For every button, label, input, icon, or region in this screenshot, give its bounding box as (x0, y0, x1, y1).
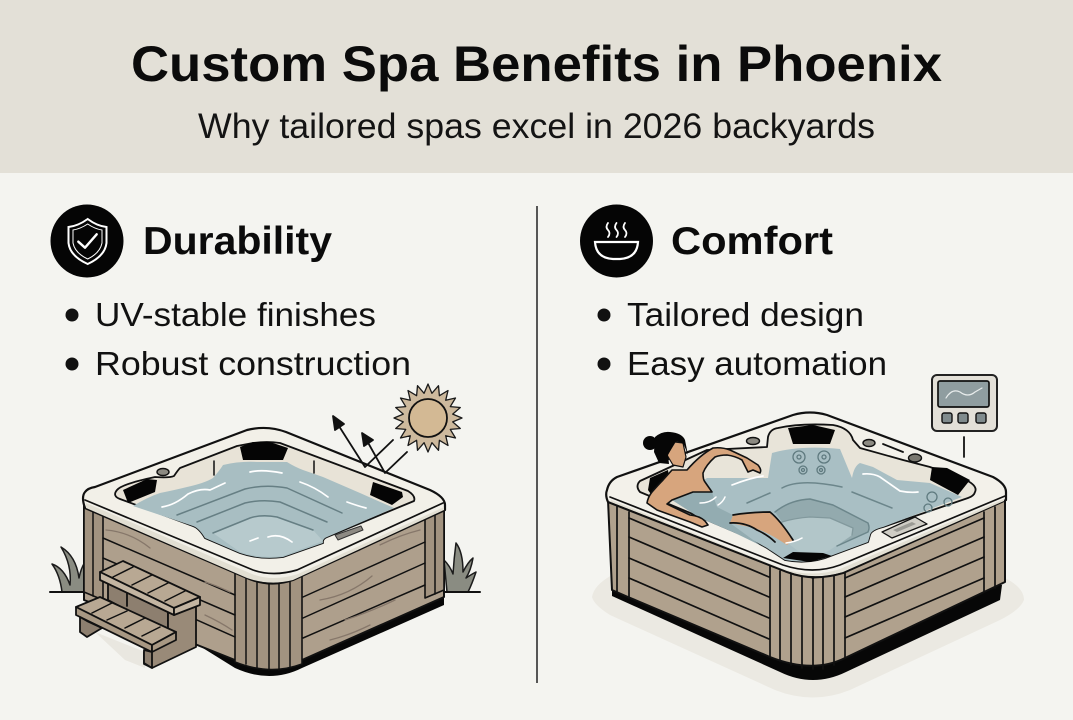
tub base (612, 585, 1002, 680)
lower step (76, 597, 176, 645)
rim (83, 428, 445, 584)
headrests (123, 442, 403, 505)
tub wall (84, 500, 444, 670)
bullet list: comfort: Easy automation (627, 345, 887, 382)
bullet list: durability: UV-stable finishes (95, 296, 376, 333)
tub interior (115, 442, 414, 558)
step ground shadow (95, 632, 145, 668)
arrows: reflected UV rays (333, 416, 407, 473)
heading: durability: Durability (143, 220, 332, 263)
header band (0, 0, 1073, 173)
face (667, 442, 686, 467)
illustration: hot tub with bather and controls (592, 375, 1024, 698)
bullet list: durability (66, 296, 411, 382)
hair (654, 432, 688, 464)
icon: shield with check (50, 204, 124, 278)
tub interior (638, 424, 976, 562)
panel: comfort (580, 204, 1024, 698)
icon: sun (394, 384, 462, 452)
control strip (882, 517, 927, 538)
rim fittings (157, 468, 169, 476)
step legs (80, 617, 102, 637)
seat contours (747, 483, 892, 560)
heading: comfort: Comfort (671, 220, 833, 263)
step riser (108, 582, 168, 632)
illustration: durable hot tub with steps (50, 384, 480, 676)
rim fittings (746, 438, 922, 462)
tub wall (608, 500, 1005, 669)
step side box (144, 606, 196, 668)
rim (606, 412, 1006, 577)
center divider (536, 206, 538, 683)
bullet list: comfort (598, 296, 887, 382)
bather (643, 432, 802, 558)
panel: durability (50, 204, 480, 676)
control panel (932, 375, 997, 457)
water (133, 462, 394, 558)
upper step (100, 561, 200, 608)
icon: grass (50, 543, 480, 592)
wall jets (793, 451, 952, 512)
tub ground shadow (592, 560, 1024, 698)
water (672, 448, 962, 562)
subtitle: Why tailored spas excel in 2026 backyards (198, 107, 875, 146)
headrests (648, 425, 970, 562)
title: Custom Spa Benefits in Phoenix (131, 36, 942, 92)
steps (76, 561, 200, 668)
tub base shadow (190, 590, 444, 676)
bullet list: comfort: Tailored design (627, 296, 864, 333)
underwater torso (672, 492, 785, 558)
bullet list: durability: Robust construction (95, 345, 411, 382)
icon: steaming bowl (580, 204, 653, 278)
water highlights (732, 474, 918, 492)
leg (730, 512, 793, 545)
torso and arms (647, 448, 761, 527)
